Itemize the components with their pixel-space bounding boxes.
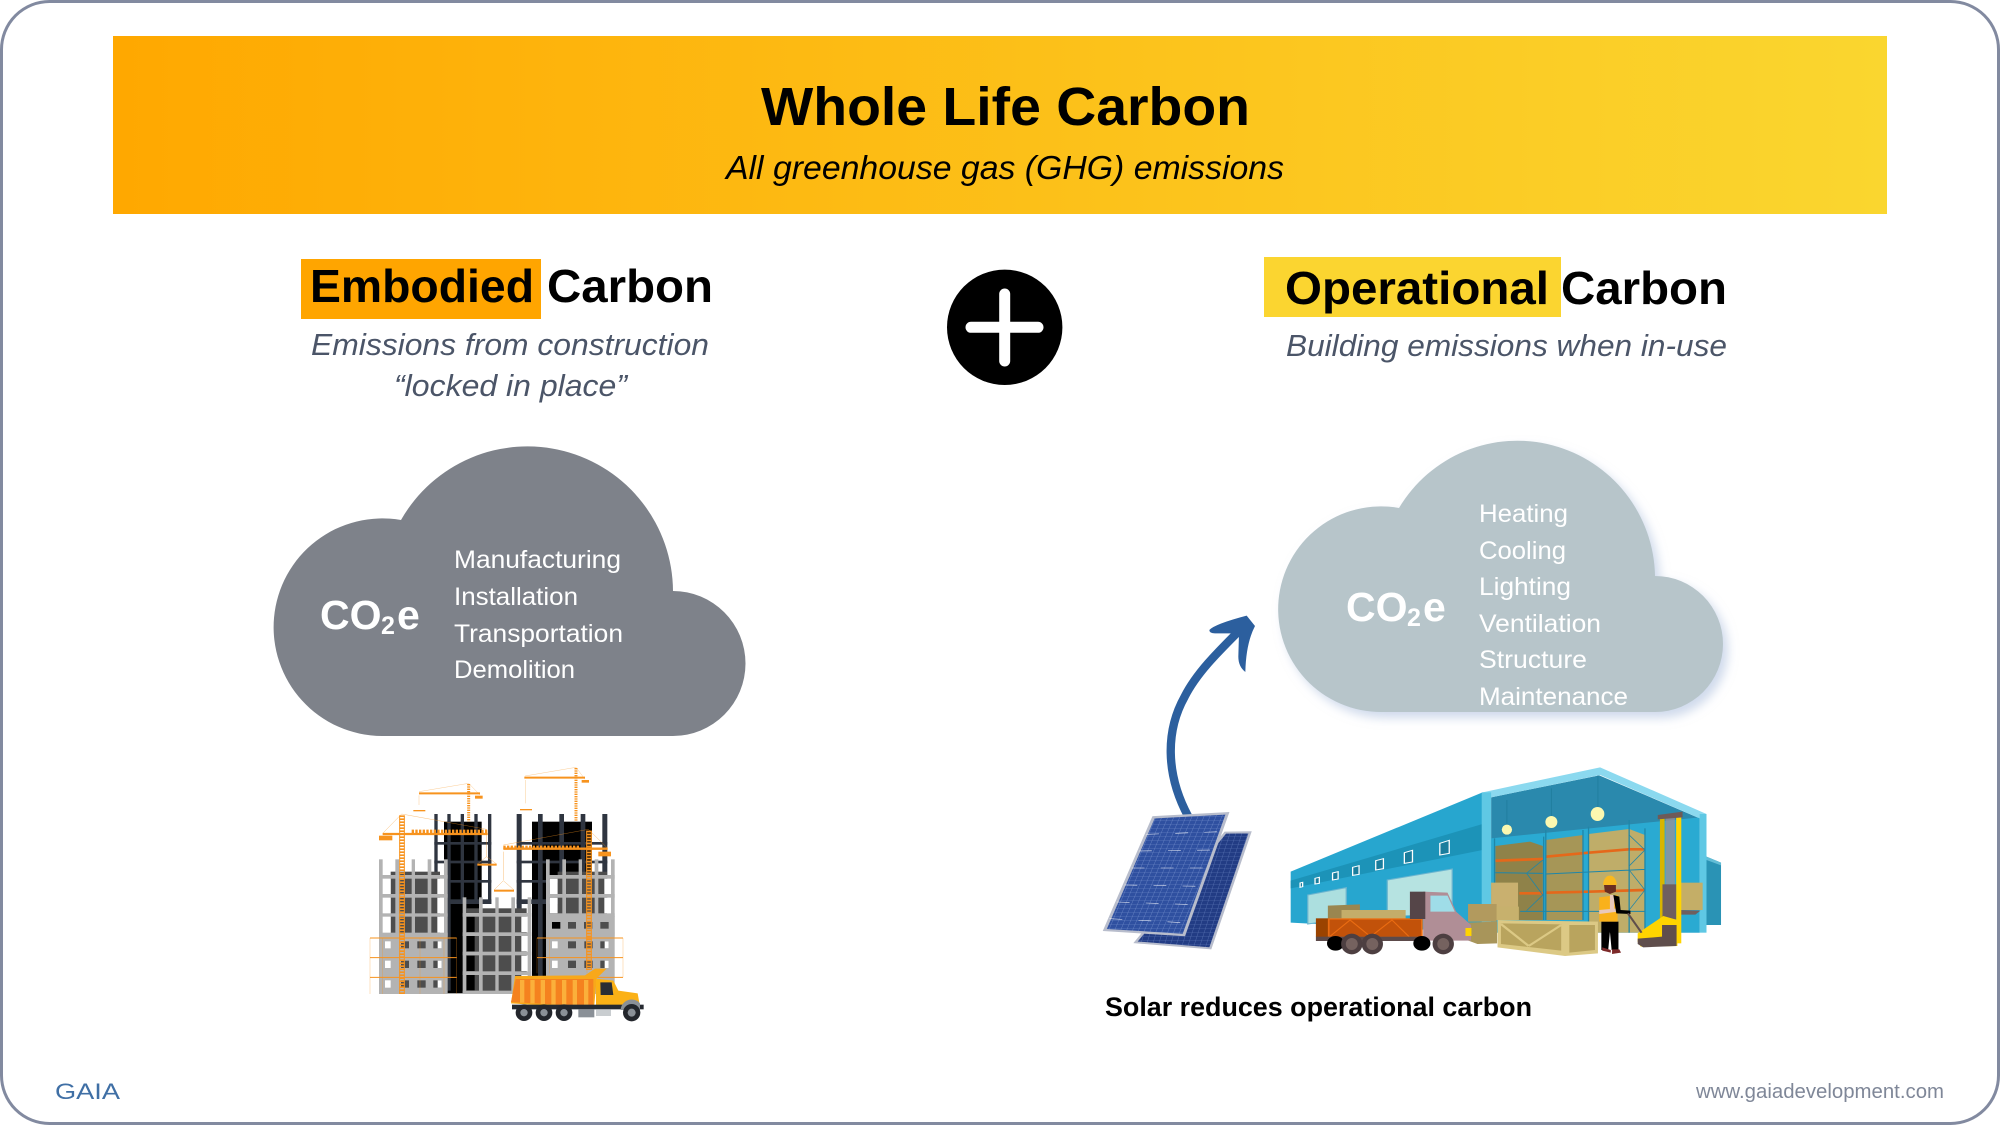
heading: embodied carbon: Embodied <box>310 260 534 312</box>
cloud: operational sources: Lighting <box>1479 573 1571 601</box>
cloud: operational sources <box>1278 441 1723 712</box>
header banner <box>113 36 1887 214</box>
cloud: embodied sources: Transportation <box>454 620 623 648</box>
icon: solar panels <box>1105 813 1250 948</box>
cloud: operational sources: Cooling <box>1479 537 1566 565</box>
cloud: operational sources: e <box>1423 584 1446 630</box>
heading: operational carbon: Operational <box>1285 262 1549 314</box>
heading: operational carbon: Carbon <box>1561 262 1727 314</box>
panel: embodied carbon <box>274 259 746 1021</box>
cloud: operational sources: 2 <box>1407 604 1421 632</box>
embodied description: “locked in place” <box>394 368 629 403</box>
icon: construction site with cranes and dump truck <box>370 767 644 1021</box>
cloud: embodied sources <box>274 446 746 736</box>
plus symbol <box>947 270 1062 385</box>
cloud: embodied sources: Manufacturing <box>454 546 621 574</box>
operational description: Building emissions when in-use <box>1286 328 1727 363</box>
logo: GAIA: GAIA <box>55 1079 120 1104</box>
subtitle: All greenhouse gas (GHG) emissions <box>724 149 1284 186</box>
cloud: operational sources: Ventilation <box>1479 610 1601 638</box>
cloud: operational sources: Heating <box>1479 500 1568 528</box>
cloud: embodied sources: Demolition <box>454 656 575 684</box>
solar caption: Solar reduces operational carbon <box>1105 992 1532 1022</box>
cloud: embodied sources: CO <box>320 592 382 638</box>
embodied description <box>311 327 709 403</box>
website url: www.gaiadevelopment.com <box>1695 1081 1944 1103</box>
cloud: operational sources: Maintenance <box>1479 683 1628 711</box>
cloud: embodied sources: 2 <box>381 612 395 640</box>
title: Whole Life Carbon <box>761 77 1250 137</box>
cloud: operational sources: Structure <box>1479 646 1587 674</box>
cloud: embodied sources: e <box>397 592 420 638</box>
arrow: solar to cloud <box>1171 616 1255 817</box>
heading: embodied carbon <box>301 259 713 319</box>
panel: operational carbon <box>1105 257 1727 1022</box>
cloud: operational sources: CO <box>1346 584 1408 630</box>
heading: embodied carbon: Carbon <box>547 260 713 312</box>
embodied description: Emissions from construction <box>311 327 709 362</box>
icon: warehouse with truck, worker and forklift <box>1291 767 1721 956</box>
cloud: embodied sources: Installation <box>454 583 578 611</box>
heading: operational carbon <box>1264 257 1727 317</box>
